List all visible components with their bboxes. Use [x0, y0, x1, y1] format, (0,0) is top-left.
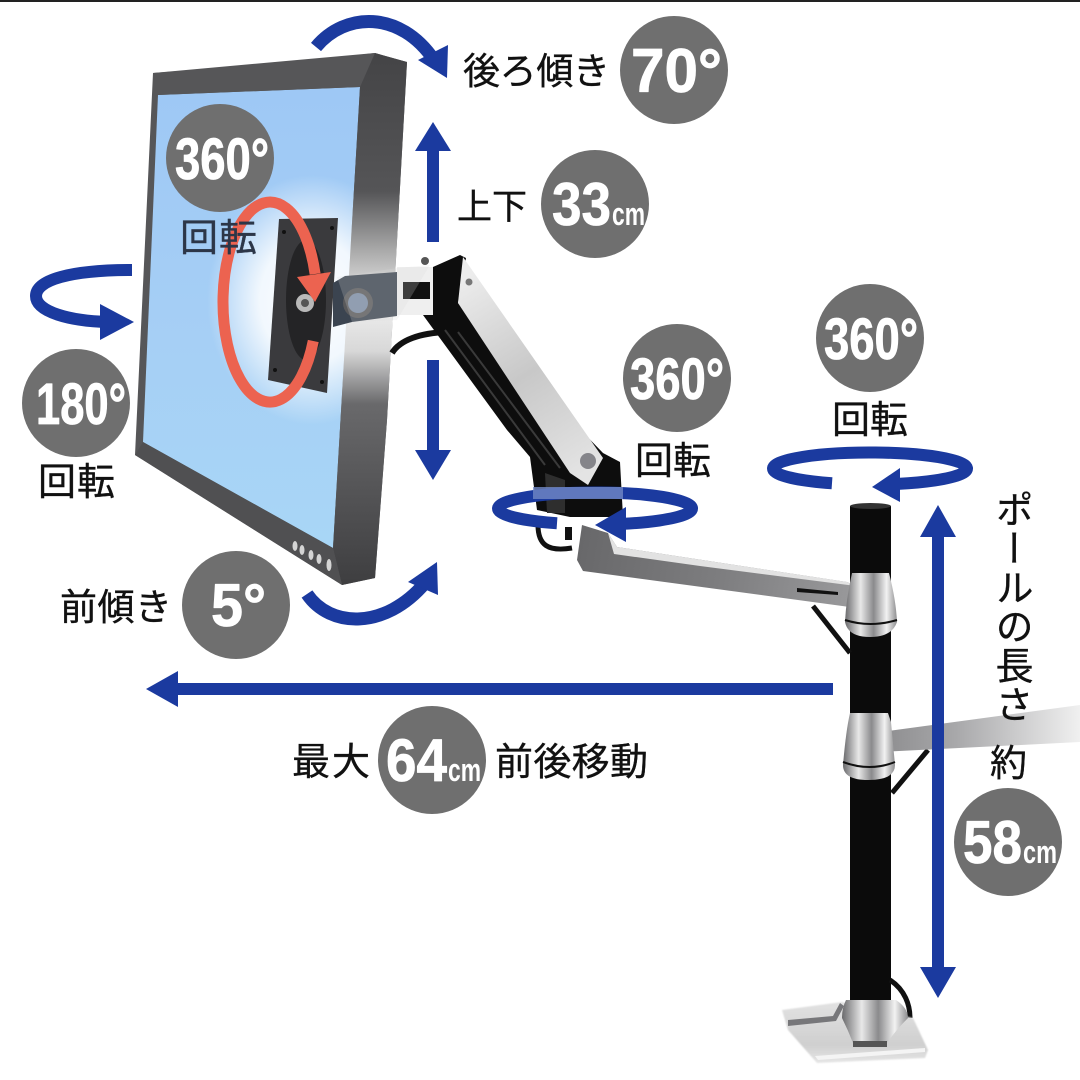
badge: 58 cm: 58 [963, 809, 1022, 876]
badge: 33 cm: cm [612, 196, 645, 232]
red rotation arrow [223, 202, 331, 402]
lower arm [577, 525, 870, 608]
badge: 33 cm [541, 150, 649, 258]
label: rotation on screen: 回転 [180, 218, 257, 260]
pole [850, 503, 891, 1004]
arrow: reach [146, 671, 833, 707]
badge: 58 cm: cm [1023, 834, 1057, 870]
tilt joint connector [333, 257, 433, 327]
rotation ring: arm joint [498, 487, 692, 542]
badge: 70 degrees [620, 16, 728, 124]
label: front-back movement: 前後移動 [495, 742, 648, 784]
label: approximately: 約 [990, 743, 1027, 784]
lower pole collar [843, 713, 895, 780]
rear arm stub [873, 705, 1080, 752]
badge: 360 degrees pole: 360° [824, 307, 918, 372]
label: rotation pole: 回転 [832, 400, 908, 442]
badge: 58 cm [954, 788, 1062, 896]
VESA mount plate [268, 218, 338, 393]
monitor side panel [333, 53, 407, 585]
label: rotation arm joint: 回転 [635, 441, 711, 483]
monitor [135, 53, 417, 585]
badge: 64 cm [378, 706, 486, 814]
badge: 64 cm: 64 [386, 727, 448, 794]
badge: 360 degrees on screen [166, 104, 274, 212]
badge: 180 degrees: 180° [36, 372, 126, 437]
cables along pole [813, 606, 928, 1018]
upper pole collar [845, 573, 897, 637]
badge: 360 degrees pole [816, 284, 924, 392]
badge: 64 cm: cm [448, 752, 481, 788]
badge: 360 degrees arm joint: 360° [630, 347, 724, 412]
label: up and down: 上下 [457, 188, 527, 227]
label: tilt forward: 前傾き [60, 587, 172, 628]
badge: 5 degrees [182, 551, 290, 659]
label: tilt back: 後ろ傾き [463, 51, 610, 92]
clamp base [782, 1000, 928, 1063]
arrow: pole length [920, 505, 956, 998]
badge: 360 degrees on screen: 360° [175, 127, 269, 192]
badge: 180 degrees [22, 349, 130, 457]
label: maximum: 最大 [292, 742, 370, 784]
arrow: bottom tilt forward [307, 562, 438, 619]
arrow: left rotation [36, 270, 134, 340]
label: pole length vertical: ポールの長さ [989, 490, 1031, 724]
badge: 360 degrees arm joint [623, 324, 731, 432]
cable behind upper arm [392, 332, 447, 353]
monitor buttons [292, 541, 332, 571]
monitor screen [143, 87, 360, 548]
arrow: top tilt back [316, 21, 448, 78]
rotation ring: pole [773, 453, 967, 502]
label: rotation left: 回転 [38, 462, 115, 504]
upper arm body [423, 255, 623, 549]
badge: 70 degrees: 70° [631, 37, 722, 106]
badge: 5 degrees: 5° [211, 572, 266, 639]
arrow: up [415, 122, 451, 242]
arrow: down [415, 360, 451, 480]
badge: 33 cm: 33 [552, 171, 611, 238]
